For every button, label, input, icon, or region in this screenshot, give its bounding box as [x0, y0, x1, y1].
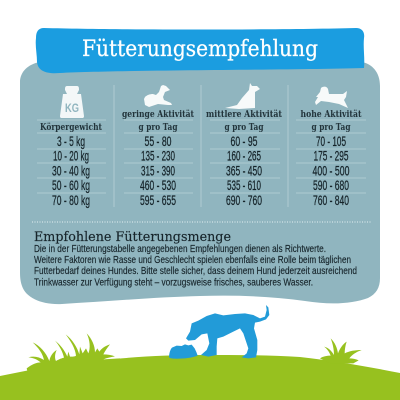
- icon: food bowl: [169, 344, 198, 359]
- column: low activity values: 315 - 390: [141, 162, 175, 178]
- column heading: hohe Aktivität: [300, 109, 362, 133]
- column heading: mittlere Aktivität: mittlere Aktivität: [206, 109, 282, 120]
- text block: feeding notes: Die in der Fütterungstabelle angegebenen Empfehlungen dienen als Richtwerte.: [34, 243, 326, 255]
- column: body weight values: 50 - 60 kg: [52, 177, 90, 193]
- icon: grass right: [320, 338, 362, 363]
- column: high activity values: [312, 133, 350, 208]
- title: Fütterungsempfehlung: [82, 37, 318, 62]
- column: high activity values: 760 - 840: [313, 192, 349, 208]
- column heading: Körpergewicht: Körpergewicht: [40, 122, 102, 133]
- column: medium activity values: 365 - 450: [226, 162, 262, 178]
- column: medium activity values: 160 - 265: [227, 148, 261, 164]
- column: low activity values: 460 - 530: [140, 177, 176, 193]
- column: body weight values: 30 - 40 kg: [52, 162, 90, 178]
- column heading: hohe Aktivität: g pro Tag: [312, 122, 351, 133]
- icon: kg weight: [60, 86, 84, 118]
- column: body weight values: 3 - 5 kg: [57, 133, 85, 149]
- title banner: [36, 28, 364, 73]
- column heading: mittlere Aktivität: g pro Tag: [224, 122, 264, 133]
- table: [37, 83, 366, 208]
- icon: kg weight: KG: [65, 101, 79, 115]
- panel: feeding table background: [20, 62, 380, 304]
- heading: recommended feeding amount: Empfohlene Fütterungsmenge: [34, 230, 231, 245]
- column: high activity values: 70 - 105: [316, 133, 346, 149]
- icon: lying dog: [144, 85, 172, 107]
- column heading: geringe Aktivität: g pro Tag: [138, 122, 178, 133]
- icon: jumping dog: [315, 87, 348, 108]
- column: medium activity values: 535 - 610: [227, 177, 261, 193]
- column: low activity values: [140, 133, 176, 208]
- column heading: geringe Aktivität: [122, 109, 194, 133]
- column heading: geringe Aktivität: geringe Aktivität: [122, 109, 194, 120]
- column: low activity values: 595 - 655: [140, 192, 176, 208]
- column heading: mittlere Aktivität: [206, 109, 282, 133]
- icon: dog eating: [186, 305, 269, 358]
- column: low activity values: 55 - 80: [144, 133, 172, 149]
- column heading: hohe Aktivität: hohe Aktivität: [300, 109, 362, 120]
- column: body weight values: [52, 133, 90, 208]
- column: body weight values: 70 - 80 kg: [52, 192, 90, 208]
- column: medium activity values: [226, 133, 262, 208]
- column: high activity values: 175 - 295: [314, 148, 349, 164]
- icon: sitting dog: [225, 83, 260, 109]
- column: medium activity values: 60 - 95: [230, 133, 258, 149]
- column: high activity values: 590 - 680: [313, 177, 349, 193]
- column: body weight values: 10 - 20 kg: [53, 148, 89, 164]
- green meadow: [0, 355, 400, 400]
- column: high activity values: 400 - 500: [312, 162, 350, 178]
- text block: feeding notes: [34, 243, 357, 288]
- column: low activity values: 135 - 230: [141, 148, 175, 164]
- column: medium activity values: 690 - 760: [226, 192, 262, 208]
- icon: grass left: [27, 333, 120, 375]
- text block: feeding notes: Trinkwasser zur Verfügung steht – vorzugsweise frisches, sauberes Wasser.: [34, 276, 313, 288]
